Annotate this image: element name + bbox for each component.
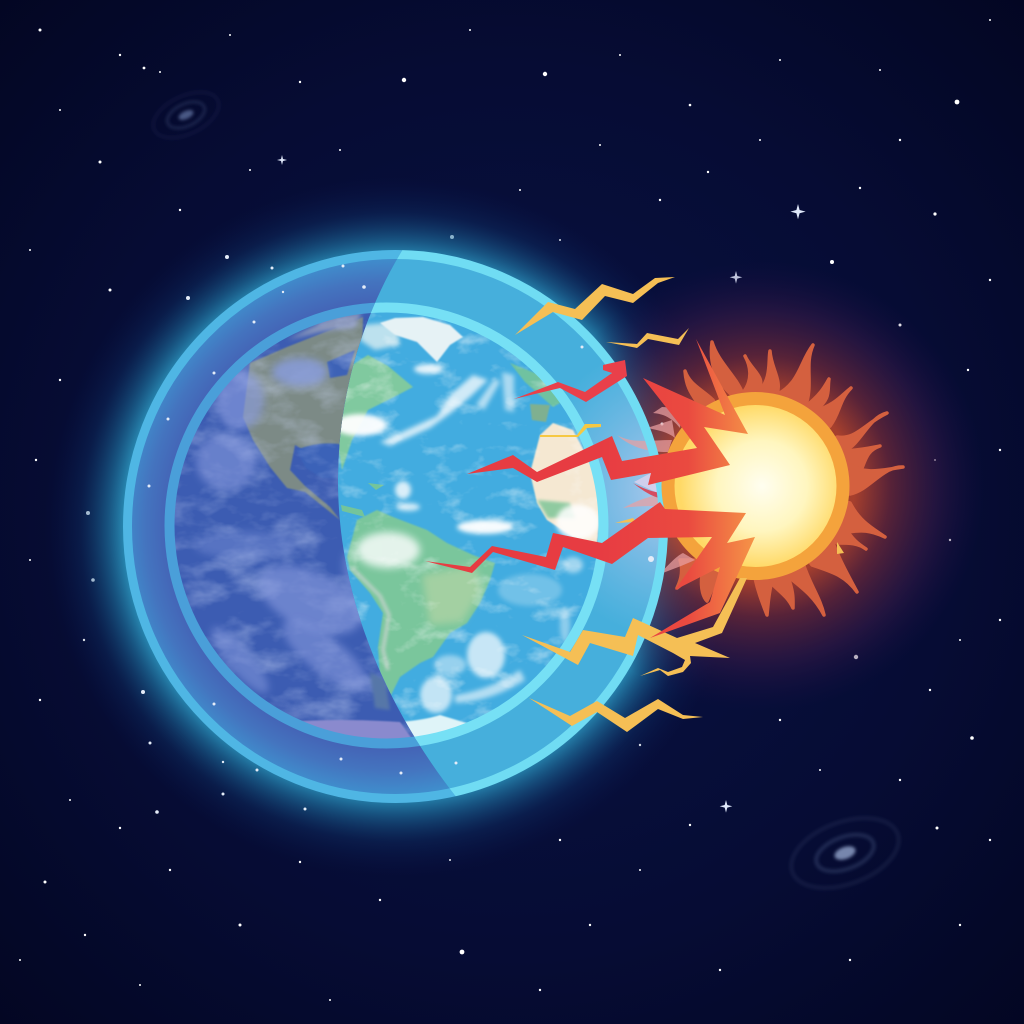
night clouds: formations (195, 358, 384, 701)
clouds: Amazon (356, 532, 420, 568)
sun glow (535, 261, 985, 711)
clouds: fine day texture (338, 313, 598, 722)
bolt: over Africa (540, 424, 601, 437)
bolt: top red (514, 360, 627, 402)
pale corona rays across shield (617, 407, 695, 575)
night land: South America edge (370, 672, 390, 710)
red lightning bolts (425, 339, 755, 638)
bolt: lower red (425, 502, 755, 638)
icon: spiral galaxy bottom right (782, 805, 908, 901)
land: Africa (530, 423, 600, 545)
bolt: small upper (606, 328, 689, 348)
magnetic shield: inner ring, day side (371, 302, 608, 746)
night clouds: texture (165, 303, 415, 747)
bolt: upper arc (515, 277, 675, 335)
magnetic shield: sunlit tint (574, 378, 659, 620)
land: Caribbean islands (341, 483, 384, 517)
land: Europe (510, 363, 565, 407)
earth globe (165, 303, 610, 750)
land: Greenland (380, 317, 463, 362)
earth: day side surface (338, 313, 598, 740)
dark red corona sliver (633, 483, 662, 499)
icon: sparkle stars (277, 155, 806, 813)
magnetic shield: night side (132, 259, 450, 794)
shield stars (141, 255, 664, 814)
land: Iberia (530, 404, 550, 422)
land: Arctic islands (360, 322, 400, 350)
bolt: bottom arc (529, 698, 703, 732)
night ocean (165, 303, 415, 747)
magnetic shield: outer ring, day side (397, 250, 668, 796)
outer atmospheric glow (45, 177, 745, 877)
night land: Arctic Canada (287, 312, 362, 340)
night land: North America (243, 317, 363, 520)
land: Andes (352, 568, 389, 670)
earth: night side surface (165, 303, 420, 750)
bolt: middle red (467, 339, 748, 485)
land: eastern Brazil (422, 565, 482, 625)
yellow lightning bolts (515, 277, 844, 732)
earth: day ocean (338, 313, 598, 734)
pale glow wedge behind flare (634, 468, 662, 495)
land: Canada and eastern North America (339, 354, 413, 470)
night land: Hudson Bay (327, 350, 355, 378)
bolt: lower from sun (522, 578, 747, 676)
land: South America (347, 510, 495, 697)
sun disc core (674, 405, 836, 567)
night land: Antarctica (301, 719, 412, 738)
bolt: corona fragment (837, 542, 844, 554)
land: Antarctica (405, 714, 468, 740)
land: Africa green belt (537, 500, 575, 518)
magnetic shield: outer ring, night side (123, 250, 456, 803)
sun disc rim (662, 392, 850, 580)
icon: spiral galaxy top left (146, 83, 226, 147)
clouds: day side formations (334, 364, 600, 713)
sun corona rays (677, 342, 903, 615)
bolt: fragment by sun (615, 518, 636, 523)
magnetic shield: inner ring, night side (164, 302, 420, 748)
night land: Gulf of Mexico (300, 442, 340, 474)
magnetic shield: day side (375, 259, 659, 788)
